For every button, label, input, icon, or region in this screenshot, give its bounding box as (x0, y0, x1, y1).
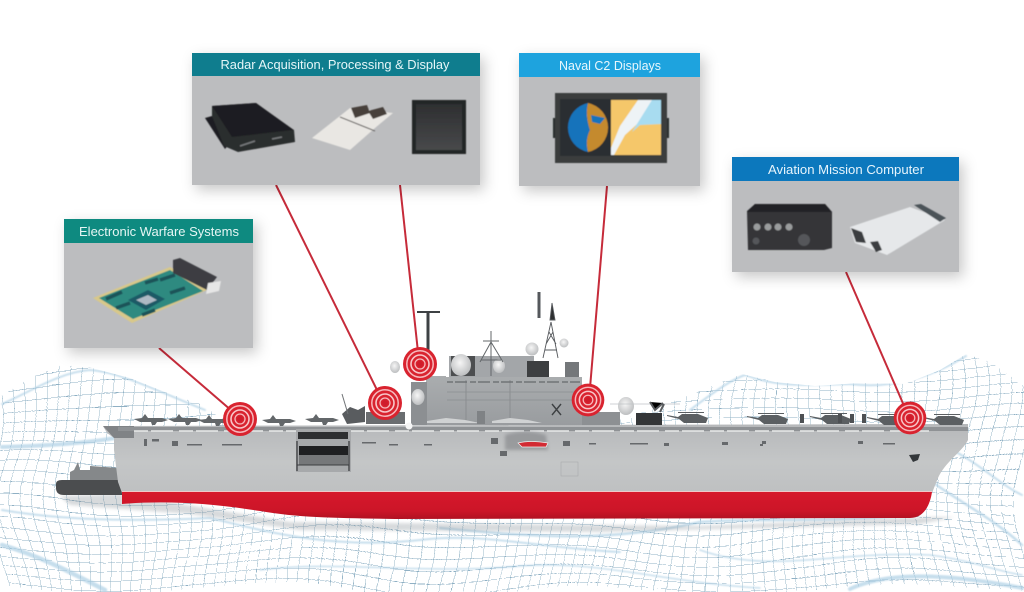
ship (103, 292, 968, 519)
lattice mast (539, 292, 558, 358)
red hull badge (505, 432, 548, 450)
target: aviation computer (894, 402, 926, 434)
forward helicopter row (667, 412, 964, 425)
product: white processing card (312, 105, 393, 150)
rear deck block and rails (636, 413, 662, 425)
wireframe sea mesh (0, 340, 1024, 592)
panel: electronic warfare systems (64, 219, 253, 348)
product: circuit board (93, 258, 221, 323)
hull door outline (561, 462, 578, 476)
heading: naval C2: Naval C2 Displays (559, 59, 661, 73)
target: naval C2 (572, 384, 604, 416)
product: black display (412, 100, 466, 154)
target: radar processing (368, 386, 402, 420)
target: electronic warfare (223, 402, 257, 436)
well deck opening (296, 429, 351, 472)
heading: naval C2 (519, 53, 700, 77)
panel: naval C2 displays (519, 53, 700, 186)
white radar domes (451, 354, 471, 376)
boot stripe (122, 490, 932, 492)
flight deck (118, 427, 968, 431)
X mark on superstructure (552, 404, 561, 415)
target: radar display (403, 347, 437, 381)
heading: aviation (732, 157, 959, 181)
panel: radar acquisition, processing and display (192, 53, 480, 185)
product: silver module (850, 204, 946, 255)
panel: aviation mission computer (732, 157, 959, 272)
hull side details (144, 438, 895, 456)
stern overhang shade (103, 426, 134, 438)
product: chart display (553, 93, 669, 163)
ship shadow on water (60, 494, 955, 532)
red lower hull (122, 492, 932, 519)
deck pieces near island (427, 418, 542, 423)
upper bridge blocks (449, 356, 534, 377)
middle mast (480, 331, 503, 376)
product: rugged computer (747, 204, 832, 250)
product: rugged black enclosure (205, 103, 295, 152)
landing craft behind the ship (56, 462, 122, 495)
heading: aviation: Aviation Mission Computer (768, 163, 924, 177)
aft tower (411, 382, 427, 425)
heading: radar (192, 53, 480, 76)
superstructure main block (426, 376, 582, 425)
forward mast (417, 311, 440, 313)
gun mount (342, 406, 365, 424)
heading: electronic warfare (64, 219, 253, 243)
sea mesh blue ribbons (2, 356, 1022, 590)
heading: electronic warfare: Electronic Warfare Systems (79, 225, 239, 239)
bow emblem (909, 454, 920, 462)
heading: radar: Radar Acquisition, Processing & Display (220, 58, 450, 72)
hull (103, 424, 968, 493)
aft aircraft row (134, 414, 339, 426)
callout lines (159, 185, 905, 411)
